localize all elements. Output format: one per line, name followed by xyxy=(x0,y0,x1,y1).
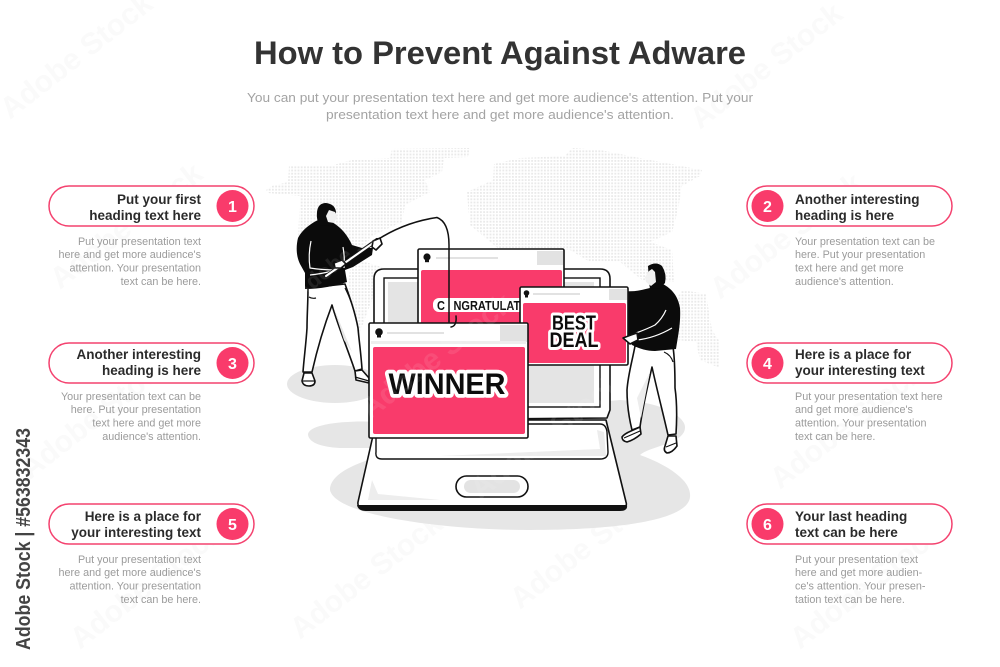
sweater xyxy=(626,284,680,351)
panel 1: heading text here xyxy=(89,208,201,223)
watermark over illustration xyxy=(288,201,629,506)
popup window: winner: WINNER xyxy=(388,368,506,401)
stock id side label: Adobe Stock | #563832343 xyxy=(13,428,35,650)
number 5: 5 xyxy=(228,517,237,534)
watermark pattern: Adobe Stock xyxy=(44,156,209,296)
number 1: 1 xyxy=(228,199,237,216)
popup window: best deal: DEAL xyxy=(550,329,599,352)
panel 5: Put your presentation text xyxy=(78,554,201,566)
fishing line and hook xyxy=(437,218,456,327)
subtitle xyxy=(247,90,754,122)
panel 5: here and get more audience's xyxy=(58,567,202,579)
watermark pattern: Adobe Stock xyxy=(504,476,669,616)
laptop base xyxy=(358,420,626,508)
panel 3: here. Put your presentation xyxy=(71,404,201,416)
watermark pattern: Adobe Stock xyxy=(64,516,229,656)
panel 2: heading is here xyxy=(795,208,895,223)
panel 2: audience's attention. xyxy=(795,276,894,288)
panel 2: Another interesting xyxy=(795,192,920,207)
watermark pattern: Adobe Stock xyxy=(764,356,929,496)
watermark over illustration: Adobe Stock xyxy=(288,201,410,304)
panel 4: Here is a place for xyxy=(795,347,912,362)
number 4 xyxy=(752,347,784,379)
watermark pattern: Adobe Stock xyxy=(704,166,869,306)
watermark over illustration: Adobe Stock xyxy=(354,286,519,426)
panel 6: text can be here xyxy=(795,525,898,540)
icon: skull xyxy=(423,253,431,262)
person right holding window xyxy=(622,264,680,453)
number 3 xyxy=(216,347,248,379)
watermark pattern: Adobe Stock xyxy=(784,516,949,656)
panel 4 xyxy=(747,343,952,443)
panel 5 xyxy=(49,504,254,606)
hood and face xyxy=(317,203,336,226)
panel 5: attention. Your presentation xyxy=(70,580,201,592)
shoes xyxy=(622,427,641,442)
subtitle: presentation text here and get more audience's attention. xyxy=(326,107,674,122)
panel 6 xyxy=(747,504,952,606)
panel 1: Put your presentation text xyxy=(78,236,201,248)
panel 4: Put your presentation text here xyxy=(795,391,943,403)
panel 4: your interesting text xyxy=(795,363,925,378)
panel 3: Your presentation text can be xyxy=(61,391,201,403)
fishing rod xyxy=(325,240,377,277)
panel 2: here. Put your presentation xyxy=(795,249,925,261)
watermark pattern: Adobe Stock xyxy=(684,0,849,136)
icon: skull xyxy=(524,290,529,298)
hands xyxy=(334,260,346,268)
panel 4: attention. Your presentation xyxy=(795,418,926,430)
panel 4: text can be here. xyxy=(795,431,875,443)
popup window: best deal xyxy=(520,287,628,365)
watermark over illustration: Adobe Stock xyxy=(464,366,629,506)
panel 6: tation text can be here. xyxy=(795,594,905,606)
sweater xyxy=(297,220,373,289)
number 6 xyxy=(752,508,784,540)
number 5 xyxy=(216,508,248,540)
watermark pattern: Adobe Stock xyxy=(284,506,449,646)
hood and face xyxy=(648,264,666,289)
laptop screen xyxy=(374,269,610,420)
panel 3: audience's attention. xyxy=(102,431,201,443)
shoes xyxy=(302,373,315,386)
panel 5: your interesting text xyxy=(71,525,201,540)
popup window: best deal: BEST xyxy=(552,312,596,335)
panel 2: text here and get more xyxy=(795,262,904,274)
panel 3: Another interesting xyxy=(76,347,201,362)
panel 4: and get more audience's xyxy=(795,404,914,416)
popup window: winner xyxy=(369,323,528,438)
number 6: 6 xyxy=(763,517,772,534)
laptop trackpad xyxy=(456,476,528,497)
panel 1 xyxy=(49,186,254,288)
panel 1: Put your first xyxy=(117,192,201,207)
watermark pattern: Adobe Stock xyxy=(14,346,179,486)
icon: skull xyxy=(375,328,383,338)
world map of dots xyxy=(266,148,720,368)
subtitle: You can put your presentation text here and get more audience's attention. Put your xyxy=(247,90,754,105)
panel 1: text can be here. xyxy=(121,276,201,288)
trousers xyxy=(303,284,362,372)
sweater folds xyxy=(309,241,337,270)
person left with fishing rod xyxy=(297,203,437,386)
panel 1: here and get more audience's xyxy=(58,249,202,261)
panel 5: Here is a place for xyxy=(85,509,202,524)
number 2: 2 xyxy=(763,199,772,216)
number 2 xyxy=(752,190,784,222)
ground shadows xyxy=(287,365,690,530)
popup window: congratulations xyxy=(418,249,564,339)
panel 5: text can be here. xyxy=(121,594,201,606)
laptop xyxy=(357,269,627,511)
popup window: congratulations: CONGRATULATIONS xyxy=(437,298,547,313)
panel 6: Your last heading xyxy=(795,509,907,524)
number 3: 3 xyxy=(228,356,237,373)
panel 3: heading is here xyxy=(102,363,201,378)
panel 2 xyxy=(747,186,952,288)
panel 1: attention. Your presentation xyxy=(70,262,201,274)
panel 6: here and get more audien- xyxy=(795,567,923,579)
trousers xyxy=(627,346,677,435)
panel 3 xyxy=(49,343,254,443)
number 4: 4 xyxy=(763,356,772,373)
panel 6: Put your presentation text xyxy=(795,554,918,566)
panel 3: text here and get more xyxy=(92,418,201,430)
number 1 xyxy=(216,190,248,222)
title: How to Prevent Against Adware xyxy=(254,35,746,71)
panel 2: Your presentation text can be xyxy=(795,236,935,248)
panel 6: ce's attention. Your presen- xyxy=(795,580,926,592)
right person's arm and hand xyxy=(623,310,672,344)
